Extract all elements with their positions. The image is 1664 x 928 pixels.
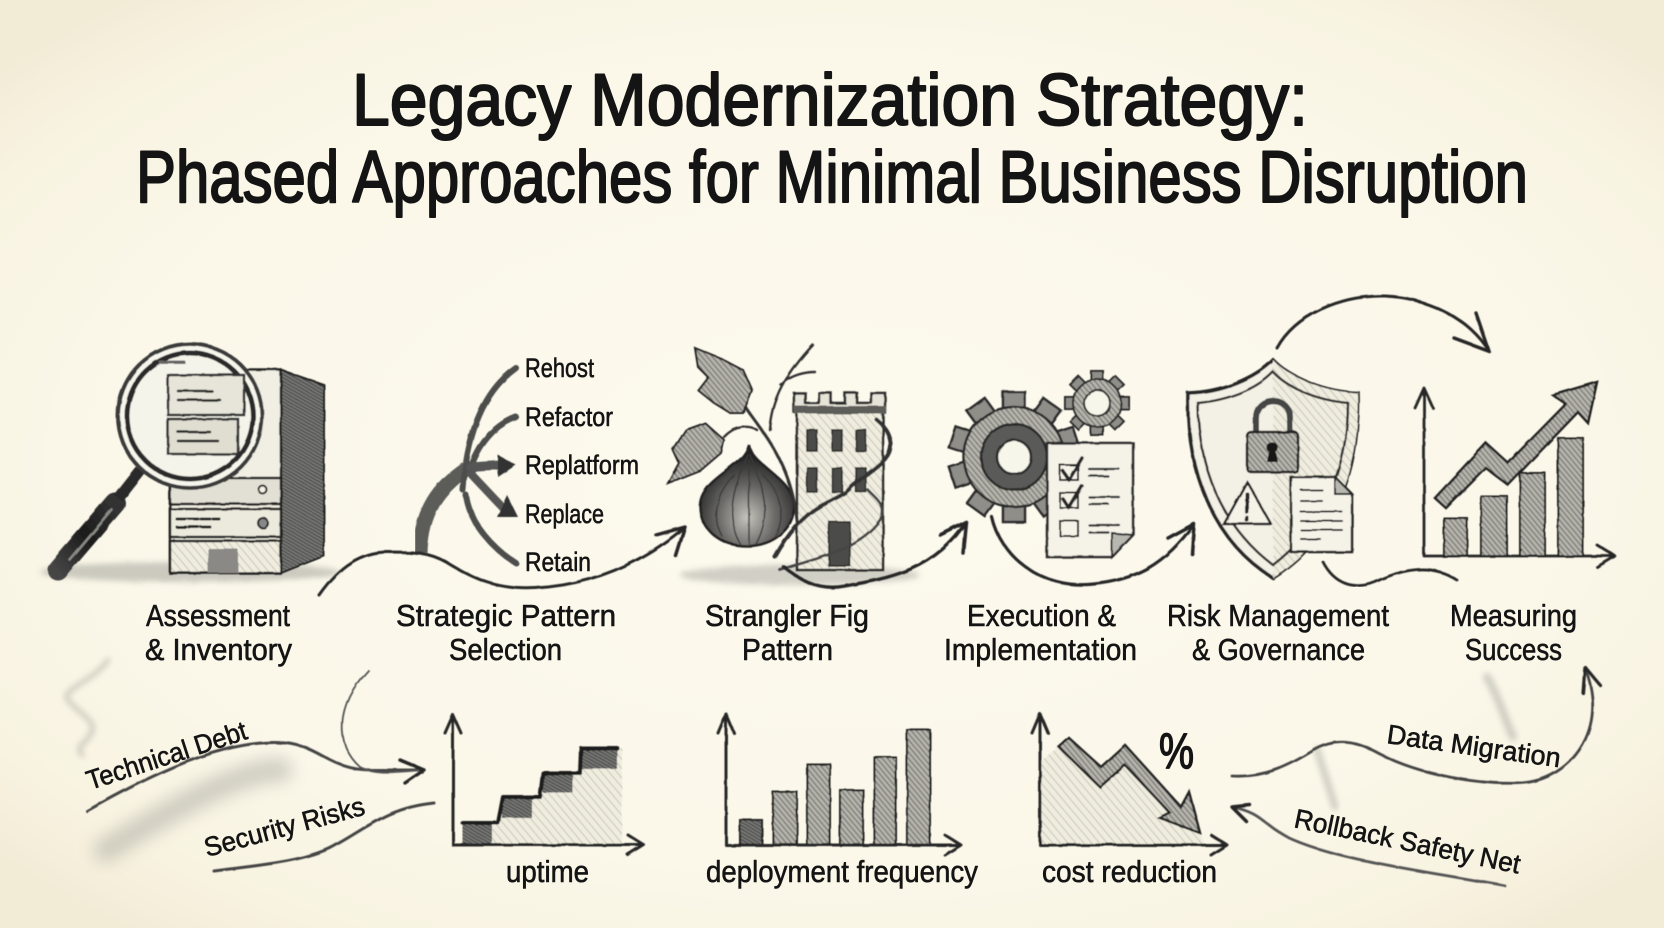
list: pattern options: Replace — [525, 499, 604, 529]
callout: data migration — [1232, 667, 1600, 783]
icon: magnifier over server — [40, 344, 340, 582]
label: risk management — [1167, 598, 1389, 667]
icon: strangler fig and tower — [668, 345, 920, 585]
label: assessment — [145, 598, 292, 667]
label: strategic pattern: Selection — [449, 632, 562, 667]
label: assessment: & Inventory — [145, 632, 292, 667]
callout: technical debt — [87, 670, 424, 811]
label: measuring success: Success — [1465, 632, 1562, 667]
step labels — [145, 598, 1577, 667]
chart: measuring success — [1415, 382, 1615, 567]
callout: rollback safety net — [1232, 805, 1505, 886]
label: execution: Implementation — [944, 632, 1137, 667]
list: pattern options: Refactor — [525, 402, 613, 432]
arrow: assessment to strangler fig — [319, 527, 685, 595]
label: measuring success — [1450, 598, 1577, 667]
text: data migration: Data Migration — [1385, 719, 1563, 773]
label: cost reduction: cost reduction — [1042, 854, 1217, 889]
label: uptime: uptime — [506, 854, 589, 889]
icon: shield with lock and warning — [1188, 360, 1358, 578]
list: pattern options: Rehost — [525, 353, 594, 383]
arrow: risk to measuring lower curve — [1323, 562, 1457, 586]
label: strategic pattern — [396, 598, 616, 667]
label: deployment frequency: deployment frequency — [706, 854, 978, 889]
list: pattern options: Replatform — [525, 450, 639, 480]
text: rollback safety net: Rollback Safety Net — [1292, 803, 1524, 880]
label: measuring success: Measuring — [1450, 598, 1577, 633]
smudges — [67, 660, 1513, 850]
title: Legacy Modernization Strategy: — [352, 60, 1308, 141]
icon: gears and checklist — [949, 371, 1133, 557]
label: execution — [944, 598, 1137, 667]
chart: cost reduction — [1032, 714, 1227, 855]
text: technical debt: Technical Debt — [83, 715, 251, 796]
title — [136, 60, 1528, 218]
label: risk management: & Governance — [1192, 632, 1365, 667]
label: risk management: Risk Management — [1167, 598, 1389, 633]
arrow: execution to risk — [992, 517, 1194, 585]
label: percent sign: % — [1159, 723, 1194, 779]
label: assessment: Assessment — [146, 598, 290, 633]
label: strangler fig: Pattern — [742, 632, 833, 667]
chart: uptime — [445, 715, 644, 855]
list: pattern options — [525, 353, 639, 577]
icon: strategic pattern fan — [420, 368, 518, 563]
arrow: strangler fig to execution — [784, 522, 966, 587]
callout: security risks — [214, 803, 434, 871]
arrow: risk arc to measuring — [1277, 296, 1489, 351]
chart: deployment frequency — [718, 714, 961, 855]
label: strangler fig: Strangler Fig — [705, 598, 869, 633]
label: strategic pattern: Strategic Pattern — [396, 598, 616, 633]
label: strangler fig — [705, 598, 869, 667]
label: execution: Execution & — [967, 598, 1116, 633]
list: pattern options: Retain — [525, 547, 591, 577]
text: security risks: Security Risks — [201, 791, 368, 863]
